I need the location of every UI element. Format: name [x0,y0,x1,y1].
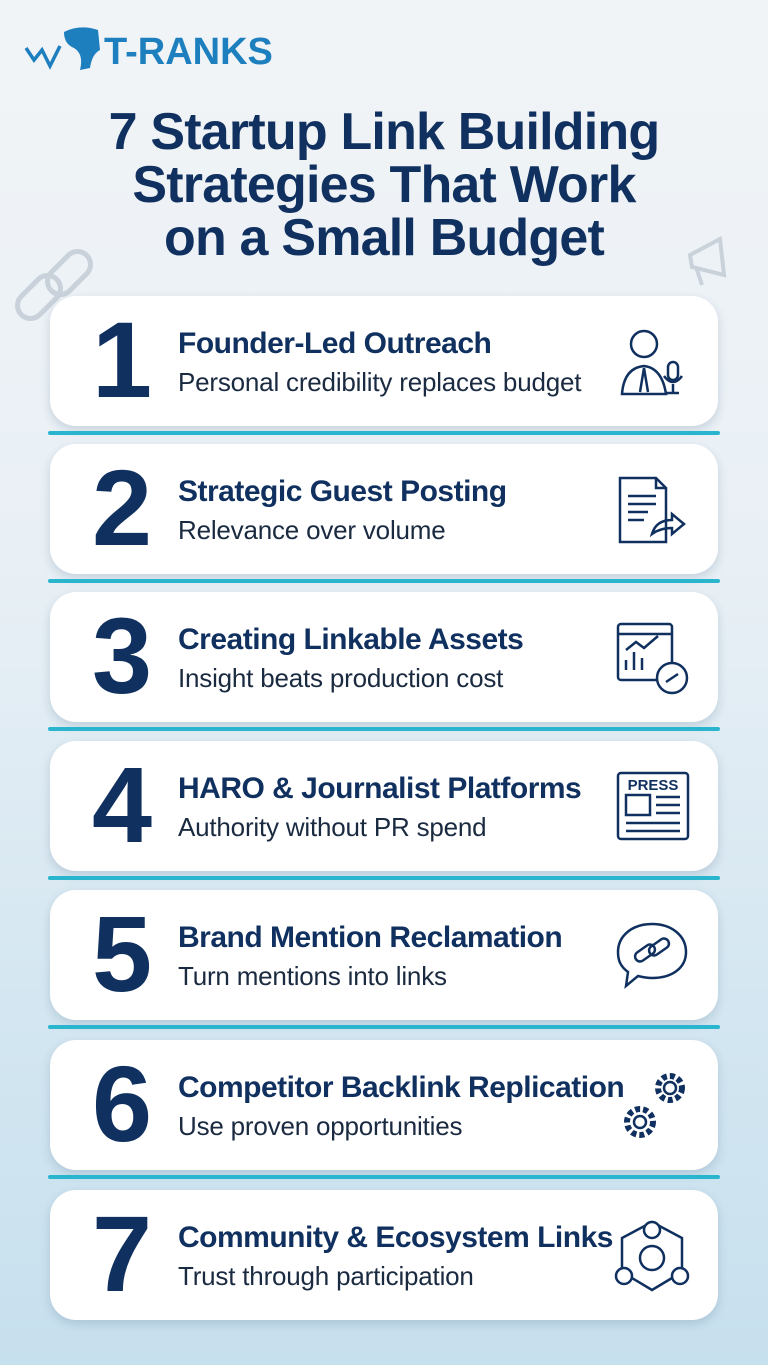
card 5 [50,890,718,1020]
card 2: Strategic Guest Posting [178,475,507,508]
card 6: 6 [92,1043,152,1164]
logo [24,27,273,73]
card 4: 4 [92,744,152,865]
title: Strategies That Work [132,156,636,214]
card 3: Creating Linkable Assets [178,623,523,656]
card 4: HARO & Journalist Platforms [178,772,581,805]
card 7 [50,1190,718,1320]
card 3: Insight beats production cost [178,663,503,693]
card 1: Personal credibility replaces budget [178,367,581,397]
card 3 [50,592,718,722]
title: 7 Startup Link Building [109,103,659,161]
icon: chart with link [616,622,688,694]
card 2: Relevance over volume [178,515,446,545]
icon: person with mic [620,330,683,396]
logo: T-RANKS [104,31,273,73]
icon: press newspaper [616,772,690,840]
card 7: 7 [92,1193,152,1314]
card 5: 5 [92,893,152,1014]
decorative icon: chain [15,249,93,321]
card 1 [50,296,718,426]
icon: press newspaper: PRESS [628,777,678,794]
card 1: Founder-Led Outreach [178,327,491,360]
card 2 [50,444,718,574]
icon: speech bubble with link [616,922,688,989]
card 7: Trust through participation [178,1261,474,1291]
icon: community network [614,1220,690,1292]
card 7: Community & Ecosystem Links [178,1221,613,1254]
card 3: 3 [92,595,152,716]
card 1: 1 [92,299,152,420]
title [109,103,659,267]
card 4: Authority without PR spend [178,812,486,842]
card 6: Competitor Backlink Replication [178,1071,624,1104]
title: on a Small Budget [164,209,604,267]
card 6 [50,1040,718,1170]
card 4 [50,741,718,871]
card 5: Turn mentions into links [178,961,447,991]
decorative icon: megaphone [688,236,726,286]
card 5: Brand Mention Reclamation [178,921,562,954]
icon: gears [624,1073,685,1138]
card 2: 2 [92,447,152,568]
icon: document share [618,476,686,544]
card 6: Use proven opportunities [178,1111,462,1141]
